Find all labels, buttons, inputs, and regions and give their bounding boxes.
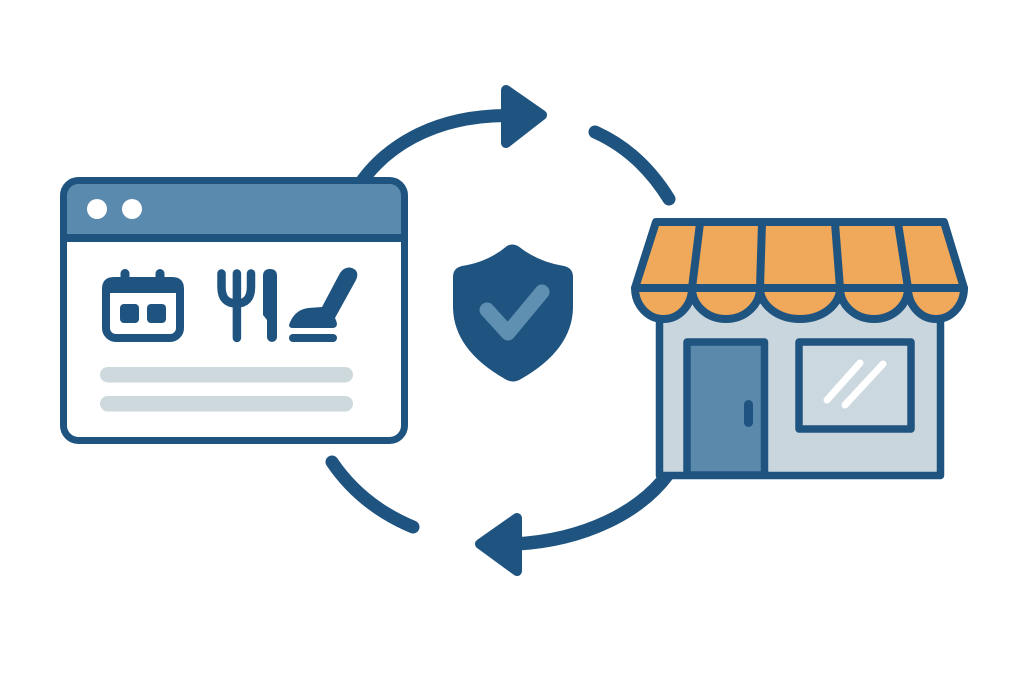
arrow: top arc from browser to top: [356, 90, 542, 190]
panel: browser window: [64, 180, 404, 440]
arrow: bottom arc from store to bottom: [480, 474, 668, 571]
door: [687, 342, 764, 475]
icon: calendar: [102, 269, 184, 338]
arc: bottom left segment: [332, 462, 413, 527]
awning: [635, 222, 964, 319]
icon: shield with check: [453, 244, 573, 382]
window dots: [87, 199, 142, 219]
icon: knife: [263, 269, 277, 342]
arc: top right segment: [595, 132, 669, 199]
window: [799, 342, 911, 429]
store body: [660, 300, 940, 476]
panel: storefront: [635, 222, 964, 476]
icon: seat: [289, 268, 357, 342]
browser title bar: [66, 184, 402, 238]
text placeholder lines: [100, 367, 353, 412]
icon: fork: [222, 274, 251, 338]
